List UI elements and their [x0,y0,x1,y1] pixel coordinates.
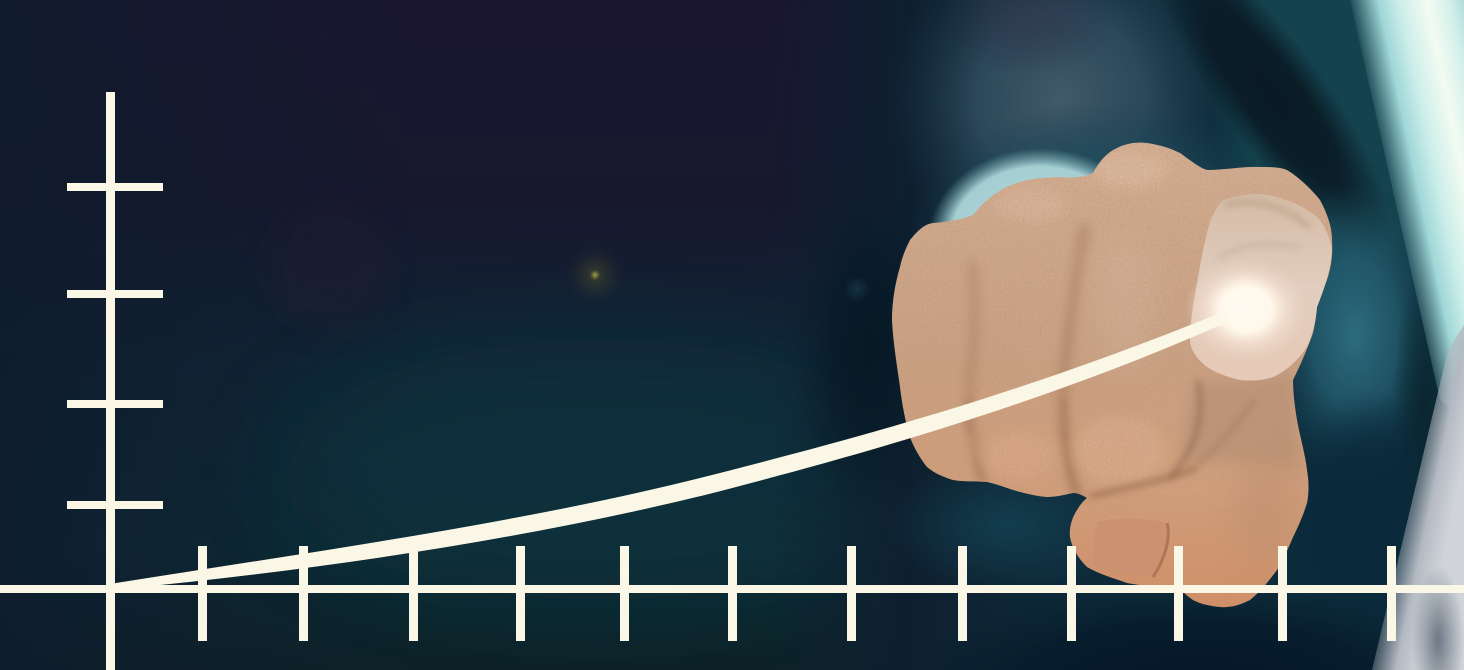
grey-blue shoulder highlight [880,0,1240,275]
palm under pointing finger [1180,375,1300,470]
light shirt stripe, top right [1350,0,1464,420]
warm fingertip bases [1074,422,1162,480]
x axis [0,585,1464,593]
finger gaps [970,262,984,482]
pointing finger [1190,194,1332,381]
grey shirt, bottom right [1372,325,1464,670]
hand: pointing fist [890,140,1335,610]
hand shading [890,140,1335,610]
lens flare [565,245,870,305]
skin grain [890,140,1335,610]
y axis [106,92,115,670]
fingertip highlight [1219,282,1271,330]
y axis ticks [67,183,163,509]
fingertip glow [1184,258,1308,362]
knuckle highlights [1094,150,1160,184]
thumb nail [1092,519,1169,577]
teal lapel [1210,0,1464,360]
blurred jacket and shirt [770,0,1464,670]
teal glow beside the hand [1270,185,1440,485]
x axis ticks [198,546,1396,641]
pale glow behind the fist [928,148,1152,332]
dark diagonal fold [1100,0,1420,280]
jacket base [770,0,1464,670]
dark shadow left of the fist [793,175,943,525]
growth curve [110,311,1230,590]
